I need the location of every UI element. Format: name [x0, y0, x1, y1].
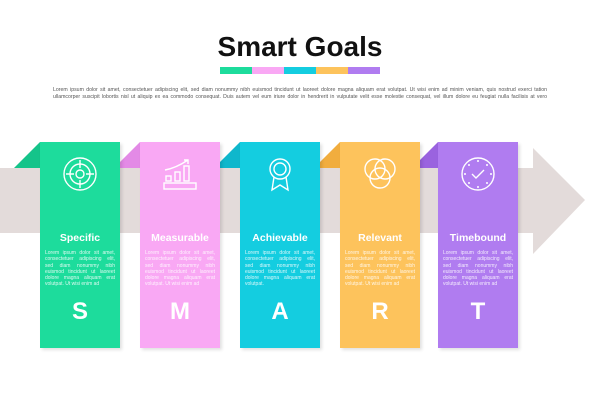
- card: specific: S: [72, 298, 88, 325]
- icon: clock: [461, 157, 495, 191]
- card: timebound: [438, 142, 518, 348]
- fold: purple: [412, 142, 438, 168]
- card: timebound: T: [471, 298, 485, 325]
- card: timebound: Timebound: [450, 232, 506, 244]
- card: specific: Specific: [60, 232, 100, 244]
- title: Smart Goals: [218, 31, 382, 62]
- icon: badge: [269, 158, 291, 192]
- card: specific: Lorem ipsum dolor sit amet, consectetuer adipiscing elit, sed diam nonummy nibh euismod tincidunt ut laoreet dolore magna aliquam erat volutpat. Ut wisi enim ad: [45, 250, 115, 287]
- card: timebound: Lorem ipsum dolor sit amet, consectetuer adipiscing elit, sed diam nonummy nibh euismod tincidunt ut laoreet dolore magna aliquam erat volutpat. Ut wisi enim ad: [443, 250, 513, 287]
- card: specific: [40, 142, 120, 348]
- card: relevant: Lorem ipsum dolor sit amet, consectetuer adipiscing elit, sed diam nonummy nibh euismod tincidunt ut laoreet dolore magna aliquam erat volutpat. Ut wisi enim ad: [345, 250, 415, 287]
- card: achievable: Achievable: [252, 232, 308, 244]
- card: measurable: Lorem ipsum dolor sit amet, consectetuer adipiscing elit, sed diam nonummy nibh euismod tincidunt ut laoreet dolore magna aliquam erat volutpat. Ut wisi enim ad: [145, 250, 215, 287]
- fold: cyan: [214, 142, 240, 168]
- card: measurable: Measurable: [151, 232, 209, 244]
- card: achievable: [240, 142, 320, 348]
- color bar: [220, 67, 380, 74]
- icon: venn: [364, 158, 396, 189]
- fold: pink: [114, 142, 140, 168]
- intro text: Lorem ipsum dolor sit amet, consectetuer adipiscing elit, sed diam nonummy nibh euismod tincidunt ut laoreet dolore magna aliquam erat volutpat. Ut wisi enim ad minim veniam, quis nostrud exerci tation ullamcorper suscipit lobortis nisl ut aliquip ex ea commodo consequat. Duis autem vel eum iriure dolor in hendrerit in vulputate velit esse molestie consequat, vel illum dolore eu feugiat nulla facilisis at vero: [53, 87, 547, 100]
- card: measurable: M: [170, 298, 190, 325]
- card: measurable: [140, 142, 220, 348]
- card: relevant: R: [371, 298, 389, 325]
- card: relevant: Relevant: [358, 232, 402, 244]
- fold: green: [14, 142, 40, 168]
- card: relevant: [340, 142, 420, 348]
- card: achievable: Lorem ipsum dolor sit amet, consectetuer adipiscing elit, sed diam nonummy nibh euismod tincidunt ut laoreet dolore magna aliquam erat volutpat.: [245, 250, 315, 287]
- card: achievable: A: [271, 298, 289, 325]
- icon: target: [63, 157, 97, 191]
- fold: orange: [314, 142, 340, 168]
- icon: chart: [163, 159, 197, 190]
